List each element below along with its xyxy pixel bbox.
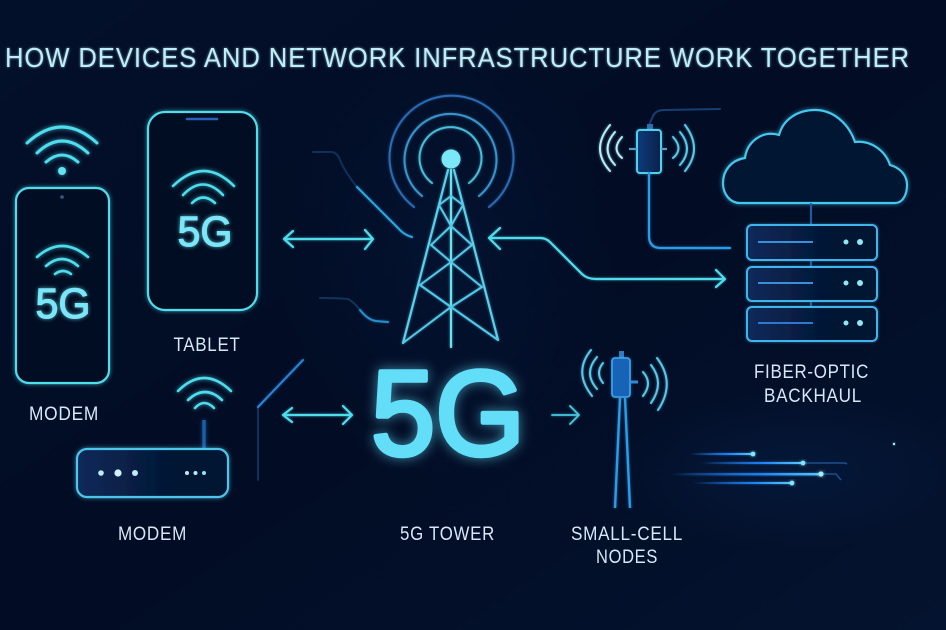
label: router modem: MODEM (118, 524, 187, 545)
label: fiber-optic backhaul: FIBER-OPTIC (754, 362, 869, 383)
phone 5G: 5G (36, 280, 90, 328)
connector: antenna fiber cable (649, 173, 730, 248)
icon: cloud (723, 110, 907, 203)
panel: router (77, 449, 228, 497)
panel: tablet (148, 112, 257, 310)
tablet 5G: 5G (178, 208, 232, 256)
label: small-cell nodes: SMALL-CELL (571, 524, 683, 545)
icon: router wifi (178, 378, 231, 449)
icon: 5G tower (403, 150, 498, 347)
icon: small-cell signal waves (582, 350, 667, 410)
icon: tower signal rings (390, 96, 514, 207)
icon: small-cell node (582, 350, 667, 508)
panel: phone (16, 188, 109, 383)
label: 5G tower: 5G TOWER (400, 524, 495, 545)
data light streaks (670, 443, 895, 485)
icon: tablet wifi (173, 171, 234, 203)
connector: lower signal trace (320, 298, 388, 322)
label: fiber-optic backhaul: BACKHAUL (764, 386, 862, 407)
label: small-cell nodes (571, 524, 683, 568)
icon: antenna signal waves (600, 125, 694, 171)
label: tablet: TABLET (174, 335, 240, 356)
arrow: 5G to small cell (552, 406, 579, 424)
label: fiber-optic backhaul (754, 362, 869, 407)
icon: phone wifi (37, 246, 88, 274)
heading: large 5G: 5G (371, 345, 525, 481)
label: phone modem: MODEM (29, 404, 99, 425)
icon: wifi above phone (27, 127, 97, 175)
server unit 3 (747, 307, 877, 341)
label: small-cell nodes: NODES (596, 547, 658, 568)
arrow: router to 5G (283, 406, 352, 424)
connector: router signal trace (258, 360, 303, 480)
arrow: backhaul to tower (489, 228, 725, 287)
icon: top antenna (600, 109, 720, 173)
connector: upper signal trace (313, 152, 412, 237)
server unit 2 (747, 267, 877, 301)
arrow: tablet to tower (284, 230, 373, 249)
server unit 1 (747, 225, 877, 260)
icon: server stack (747, 203, 877, 341)
